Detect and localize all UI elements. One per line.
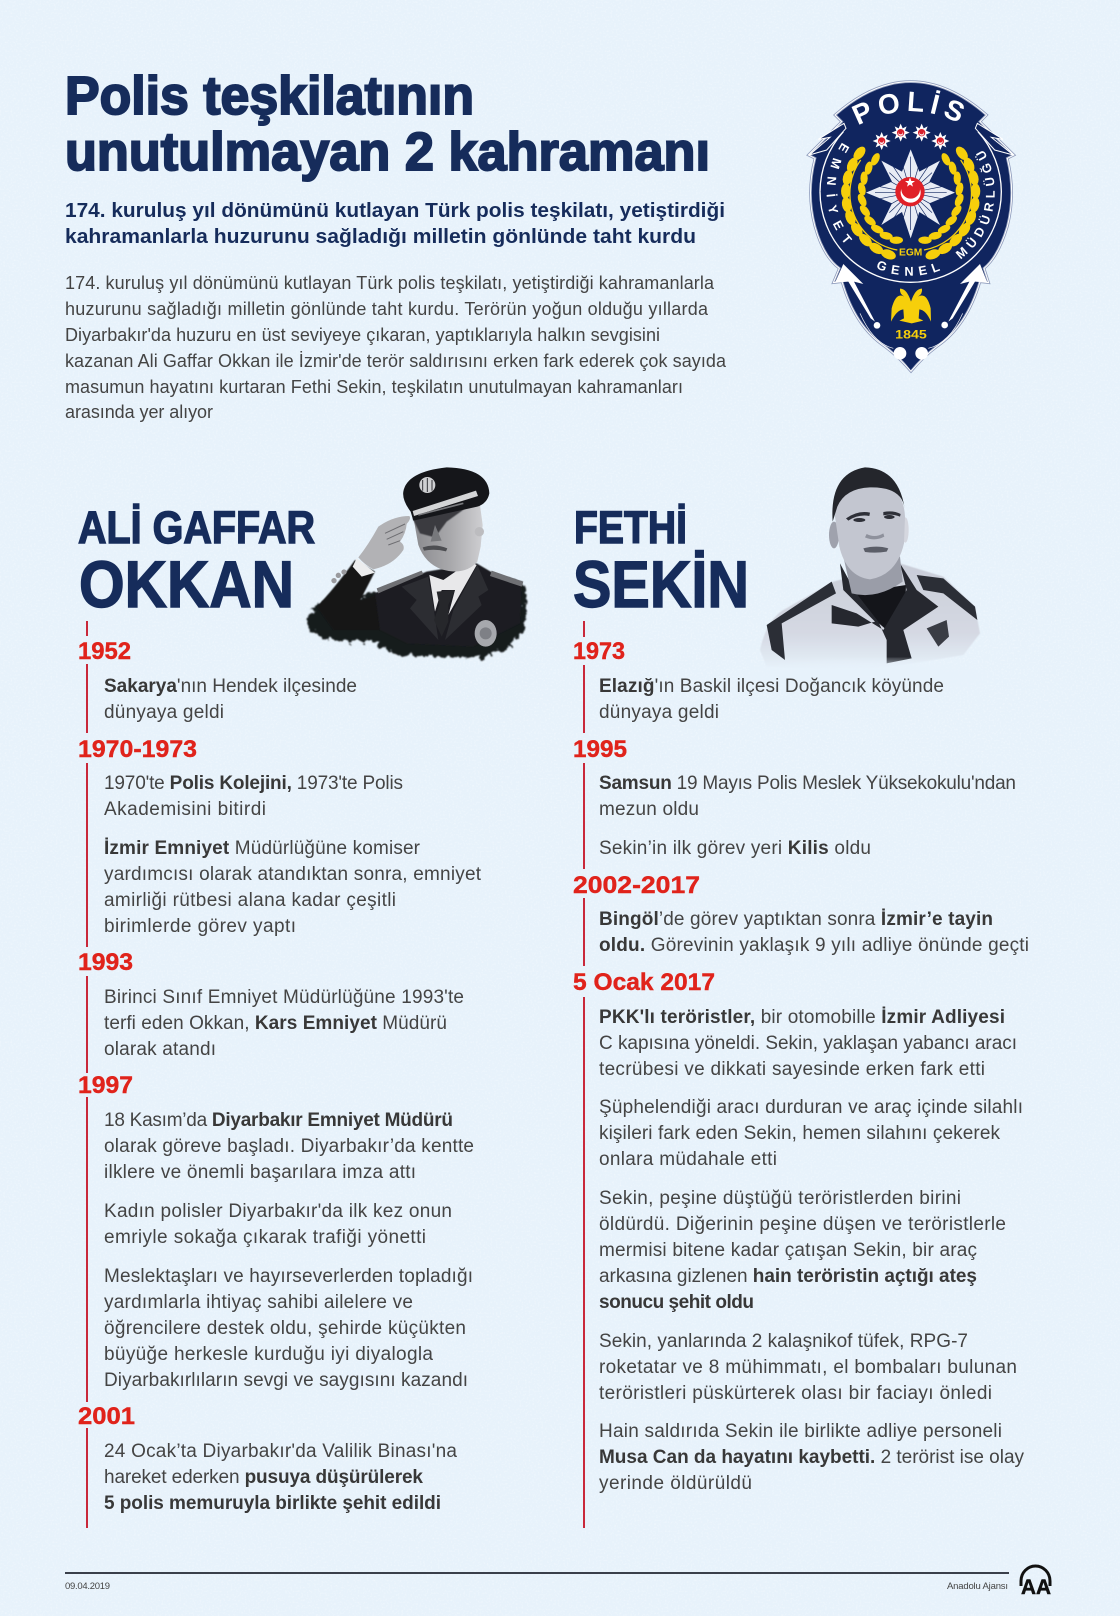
medal [475, 620, 497, 647]
entry: 5 Ocak 2017: PKK'lı teröristler, bir otomobille İzmir Adliyesi [599, 1007, 1005, 1028]
title [65, 66, 710, 182]
name: Ali Gaffar Okkan: ALİ GAFFAR [78, 502, 315, 553]
entry: 2002-2017: Bingöl’de görev yaptıktan sonra İzmir’e tayin [599, 909, 993, 930]
name: Ali Gaffar Okkan: OKKAN [79, 547, 294, 621]
entry: 1995 [573, 736, 1016, 859]
head [835, 480, 905, 579]
badge: year: 1845 [895, 328, 927, 342]
subtitle: kahramanlarla huzurunu sağladığı milletin gönlünde taht kurdu [65, 226, 696, 248]
timeline: Ali Gaffar Okkan [78, 621, 482, 1528]
timeline line [86, 621, 88, 1528]
entry: 5 Ocak 2017 [573, 969, 1024, 1494]
entry: 5 Ocak 2017: Şüphelendiği aracı durduran ve araç içinde silahlı [599, 1097, 1023, 1118]
portrait: Ali Gaffar Okkan [307, 467, 527, 658]
entry: 2001: hareket ederken pusuya düşürülerek [104, 1467, 423, 1488]
entry: 5 Ocak 2017: teröristleri püskürterek olası bir faciayı önledi [599, 1383, 992, 1404]
timeline: Fethi Sekin [573, 621, 1029, 1528]
entry: 2002-2017 [573, 872, 1029, 956]
entry: 5 Ocak 2017: tecrübesi ve dikkati sayesinde erken fark etti [599, 1059, 985, 1080]
footer source: Anadolu Ajansı [947, 1581, 1008, 1592]
cap [403, 467, 489, 521]
entry: 1952: Sakarya'nın Hendek ilçesinde [104, 676, 357, 697]
name: Fethi Sekin: FETHİ [574, 502, 687, 553]
entry: 2002-2017: oldu. Görevinin yaklaşık 9 yılı adliye önünde geçti [599, 935, 1029, 956]
entry: 1993 [78, 949, 464, 1060]
entry: 1993: Birinci Sınıf Emniyet Müdürlüğüne 1993'te [104, 987, 464, 1008]
entry: 1995: Sekin’in ilk görev yeri Kilis oldu [599, 838, 871, 859]
entry: 5 Ocak 2017: roketatar ve 8 mühimmatı, el bombaları bulunan [599, 1357, 1017, 1378]
entry: 2001: 2001 [78, 1403, 135, 1430]
entry: 1973 [573, 638, 944, 723]
entry: 5 Ocak 2017: öldürdü. Diğerinin peşine düşen ve teröristlerle [599, 1214, 1006, 1235]
entry: 1970-1973: Akademisini bitirdi [104, 799, 266, 820]
entry: 1997: 1997 [78, 1072, 133, 1099]
entry: 1952: 1952 [78, 638, 131, 665]
entry: 1997: Diyarbakırlıların sevgi ve saygısını kazandı [104, 1370, 468, 1391]
entry: 2001: 24 Ocak’ta Diyarbakır'da Valilik Binası'na [104, 1441, 457, 1462]
tie [434, 590, 455, 637]
entry: 1997 [78, 1072, 474, 1391]
entry: 5 Ocak 2017: kişileri fark eden Sekin, hemen silahını çekerek [599, 1123, 1000, 1144]
entry: 1997: yardımlarla ihtiyaç sahibi ailelere ve [104, 1292, 413, 1313]
brows, eyes, nose, mouth [846, 511, 901, 553]
sleeve [317, 560, 380, 630]
shirt cuff [353, 558, 375, 577]
intro paragraph: masumun hayatını kurtaran Fethi Sekin, teşkilatın unutulmayan kahramanları [65, 377, 683, 397]
ragged lower uniform [307, 573, 527, 658]
hand [358, 516, 410, 569]
subtitle [65, 200, 725, 248]
entry: 2002-2017: 2002-2017 [573, 872, 700, 899]
neck and face [413, 500, 483, 571]
entry: 1970-1973: 1970'te Polis Kolejini, 1973'te Polis [104, 773, 403, 794]
subtitle: 174. kuruluş yıl dönümünü kutlayan Türk polis teşkilatı, yetiştirdiği [65, 200, 725, 222]
footer [65, 1566, 1051, 1599]
entry: 1997: Meslektaşları ve hayırseverlerden topladığı [104, 1266, 473, 1287]
badge lettering: ring: MÜDÜRLÜĞÜ [956, 151, 995, 260]
bottom fade [743, 663, 990, 690]
entry: 1997: emriyle sokağa çıkarak trafiği yönetti [104, 1227, 426, 1248]
jacket [760, 563, 980, 672]
badge: EGM: EGM [899, 247, 922, 258]
entry: 1952: dünyaya geldi [104, 702, 224, 723]
intro paragraph [65, 273, 727, 422]
entry: 1997: büyüğe herkesle kurduğu iyi diyalogla [104, 1344, 433, 1365]
entry: 1997: öğrencilere destek oldu, şehirde küçükten [104, 1318, 466, 1339]
neck [843, 557, 903, 595]
name: Ali Gaffar Okkan [78, 502, 315, 621]
entry: 2001: 5 polis memuruyla birlikte şehit edildi [104, 1493, 441, 1514]
badge: wreath [841, 144, 981, 261]
entry: 5 Ocak 2017: sonucu şehit oldu [599, 1292, 754, 1313]
icon: AA logo: AA [1021, 1576, 1051, 1599]
cuff buttons [331, 569, 347, 583]
intro paragraph: huzurunu sağladığı milletin gönlünde taht kurdu. Terörün yoğun olduğu yıllarda [65, 299, 709, 319]
title: Polis teşkilatının [65, 66, 474, 126]
entry: 5 Ocak 2017: 5 Ocak 2017 [573, 969, 715, 996]
epaulettes [377, 571, 423, 593]
lapels [402, 577, 438, 640]
entry: 1997: Kadın polisler Diyarbakır'da ilk kez onun [104, 1201, 452, 1222]
name: Fethi Sekin: SEKİN [573, 547, 749, 621]
intro paragraph: 174. kuruluş yıl dönümünü kutlayan Türk polis teşkilatı, yetiştirdiği kahramanlarla [65, 273, 715, 293]
name: Fethi Sekin [573, 502, 749, 621]
entry: 1970-1973: İzmir Emniyet Müdürlüğüne komiser [104, 838, 421, 859]
badge lettering: POLIS: POLİS [852, 90, 964, 125]
entry: 5 Ocak 2017: Musa Can da hayatını kaybetti. 2 terörist ise olay [599, 1447, 1024, 1468]
intro paragraph: kazanan Ali Gaffar Okkan ile İzmir'de terör saldırısını erken fark ederek çok sayıda [65, 351, 727, 371]
badge: central star [866, 149, 955, 238]
entry: 1952 [78, 638, 357, 723]
badge: four small stars [873, 124, 949, 150]
entry: 5 Ocak 2017: C kapısına yöneldi. Sekin, yaklaşan yabancı aracı [599, 1033, 1017, 1054]
entry: 1970-1973 [78, 736, 482, 937]
entry: 2001 [78, 1403, 457, 1514]
badge lettering: ring: EMNİYET [826, 142, 852, 243]
entry: 1995: Samsun 19 Mayıs Polis Meslek Yüksekokulu'ndan [599, 773, 1016, 794]
entry: 1997: olarak göreve başladı. Diyarbakır’da kentte [104, 1136, 474, 1157]
entry: 1993: 1993 [78, 949, 133, 976]
entry: 5 Ocak 2017: yerinde öldürüldü [599, 1473, 752, 1494]
entry: 1970-1973: birimlerde görev yaptı [104, 916, 296, 937]
portrait: Fethi Sekin [743, 467, 990, 690]
entry: 5 Ocak 2017: onlara müdahale etti [599, 1149, 777, 1170]
entry: 1995: mezun oldu [599, 799, 699, 820]
entry: 1973: 1973 [573, 638, 625, 665]
timeline line [583, 621, 585, 1528]
ears [829, 522, 839, 548]
shirt [429, 562, 477, 615]
icon: AA logo [1021, 1566, 1051, 1599]
entry: 1970-1973: 1970-1973 [78, 736, 197, 763]
hair [832, 467, 905, 522]
entry: 1997: 18 Kasım’da Diyarbakır Emniyet Müdürü [104, 1110, 453, 1131]
badge lettering: ring: GENEL [877, 261, 940, 276]
badge lettering: ring [826, 142, 995, 276]
icon: police badge [806, 80, 1016, 374]
entry: 1993: terfi eden Okkan, Kars Emniyet Müdürü [104, 1013, 447, 1034]
entry: 1970-1973: yardımcısı olarak atandıktan sonra, emniyet [104, 864, 482, 885]
patch [927, 620, 949, 647]
badge: double-headed eagle [891, 289, 931, 323]
entry: 5 Ocak 2017: Sekin, peşine düştüğü teröristlerden birini [599, 1188, 961, 1209]
entry: 1993: olarak atandı [104, 1039, 216, 1060]
entry: 1973: Elazığ'ın Baskil ilçesi Doğancık köyünde [599, 676, 944, 697]
entry: 1973: dünyaya geldi [599, 702, 719, 723]
entry: 5 Ocak 2017: Hain saldırıda Sekin ile birlikte adliye personeli [599, 1421, 1002, 1442]
entry: 1970-1973: amirliği rütbesi alana kadar çeşitli [104, 890, 396, 911]
collar and shirt [852, 585, 906, 637]
entry: 5 Ocak 2017: arkasına gizlenen hain teröristin açtığı ateş [599, 1266, 977, 1287]
entry: 5 Ocak 2017: Sekin, yanlarında 2 kalaşnikof tüfek, RPG-7 [599, 1331, 968, 1352]
title: unutulmayan 2 kahramanı [65, 122, 710, 182]
entry: 5 Ocak 2017: mermisi bitene kadar çatışan Sekin, bir araç [599, 1240, 977, 1261]
footer date: 09.04.2019 [65, 1581, 110, 1592]
entry: 1997: ilklere ve önemli başarılara imza attı [104, 1162, 416, 1183]
badge: lower arrows [835, 264, 987, 370]
intro paragraph: arasında yer alıyor [65, 402, 213, 422]
upper jacket [375, 563, 522, 647]
intro paragraph: Diyarbakır'da huzuru en üst seviyeye çıkaran, yaptıklarıyla halkın sevgisini [65, 325, 660, 345]
entry: 1995: 1995 [573, 736, 627, 763]
